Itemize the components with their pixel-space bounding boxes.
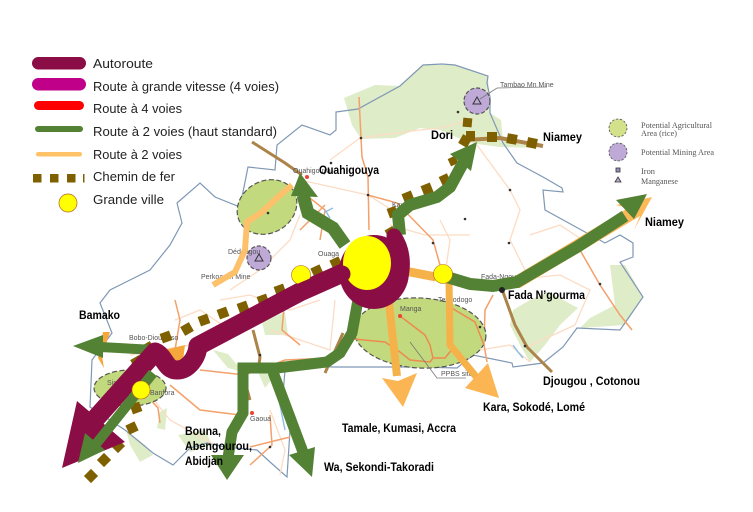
motorway with ring around Ouagadougou — [62, 235, 409, 468]
destination labels: Niamey — [543, 132, 583, 144]
potential area legend — [609, 119, 714, 186]
railway — [84, 118, 538, 483]
potential area legend: Potential Agricultural — [641, 121, 713, 130]
light green zones — [126, 65, 643, 462]
destination labels — [79, 130, 685, 474]
town dots — [132, 111, 601, 448]
country border — [90, 64, 643, 477]
minor roads — [130, 120, 590, 475]
mine symbols — [255, 87, 547, 378]
potential area legend: Iron — [641, 167, 655, 176]
small place labels: Banfora — [150, 390, 175, 397]
road legend: Grande ville — [93, 192, 164, 207]
destination labels: Abidjan — [185, 456, 223, 468]
small place labels: Ouaga — [318, 251, 339, 258]
agricultural areas — [94, 169, 488, 406]
destination labels: Tamale, Kumasi, Accra — [342, 423, 457, 435]
motorway approach over Ouaga — [300, 274, 342, 292]
Manga area roads — [354, 307, 484, 362]
major cities — [132, 236, 452, 399]
brown corridors — [243, 138, 552, 400]
small place labels: Tenkodogo — [438, 297, 472, 304]
small place labels: Tambao Mn Mine — [500, 82, 554, 89]
potential area legend: Manganese — [641, 177, 678, 186]
small place labels — [107, 82, 554, 423]
mining areas — [247, 88, 490, 270]
green road over motorway to southwest — [78, 373, 153, 463]
orange road arrows — [98, 185, 499, 407]
water — [278, 208, 523, 430]
small place labels: Sindou — [107, 380, 129, 387]
orange road: west to Niamey shadow — [495, 197, 652, 288]
destination labels: Niamey — [645, 217, 685, 229]
Fada junction — [499, 287, 505, 293]
small place labels: Dédougou — [228, 249, 260, 256]
road legend: Route à 2 voies — [93, 147, 182, 162]
destination labels: Ouahigouya — [319, 165, 380, 177]
destination labels: Wa, Sekondi-Takoradi — [324, 462, 434, 474]
two-lane high-standard arrows — [73, 142, 647, 480]
small place labels: Ouahigouya — [293, 168, 331, 175]
potential area legend: Potential Mining Area — [641, 148, 714, 157]
road legend: Route à 4 voies — [93, 101, 182, 116]
road legend: Route à grande vitesse (4 voies) — [93, 79, 279, 94]
small place labels: Gaoua — [250, 416, 271, 423]
road legend: Route à 2 voies (haut standard) — [93, 124, 277, 139]
potential area legend: Area (rice) — [641, 129, 677, 138]
road legend: Chemin de fer — [93, 169, 176, 184]
road legend — [32, 56, 279, 212]
major roads — [146, 97, 632, 465]
small place labels: Fada-Ngourma — [481, 274, 528, 281]
destination labels: Kara, Sokodé, Lomé — [483, 402, 585, 414]
map base — [90, 64, 643, 477]
destination labels: Djougou , Cotonou — [543, 376, 640, 388]
destination labels: Bamako — [79, 310, 120, 322]
small place labels: PPBS site — [441, 371, 473, 378]
small place labels: Perkoa Zn Mine — [201, 274, 251, 281]
destination labels: Bouna, — [185, 426, 221, 438]
road legend: Autoroute — [93, 56, 153, 71]
destination labels: Fada N’gourma — [508, 290, 586, 302]
Bobo urban patch — [165, 345, 185, 362]
small place labels: Bobo-Dioulasso — [129, 335, 179, 342]
destination labels: Abengourou, — [185, 441, 252, 453]
small place labels: Kaya — [392, 202, 408, 209]
destination labels: Dori — [431, 130, 453, 142]
small place labels: Manga — [400, 306, 422, 313]
